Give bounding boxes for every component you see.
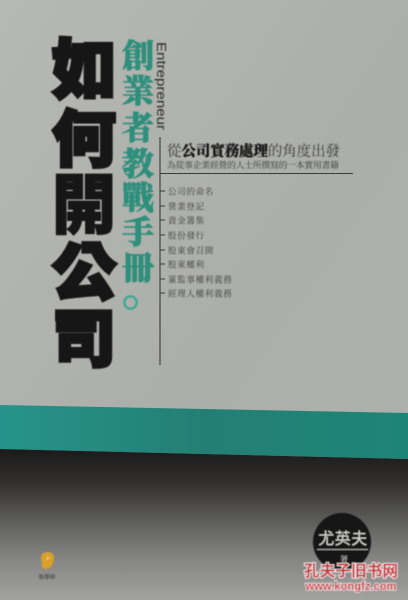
tagline second line: 為從事企業經營的人士所撰寫的一本實用書籍 [167, 159, 339, 170]
main title: 開 [52, 168, 116, 242]
main title: 如 [52, 33, 116, 107]
main title [52, 33, 116, 375]
topic list: 經理人權利義務 [168, 288, 232, 298]
tagline: 從公司實務處理的角度出發 [167, 142, 340, 160]
subtitle: green vertical: 創 [122, 38, 154, 74]
topic list: 股東會召開 [168, 246, 214, 256]
subtitle: green vertical: 者 [122, 110, 154, 146]
tagline [167, 142, 340, 170]
author badge: 著 [340, 554, 348, 564]
topic list: 資金籌集 [168, 216, 205, 226]
topic list: 營業登記 [168, 202, 205, 212]
main title: 何 [52, 106, 116, 175]
watermark: 孔夫子旧书网 [304, 561, 398, 580]
subtitle: green vertical: 教 [122, 146, 154, 182]
subtitle: green vertical: 手 [122, 214, 154, 250]
watermark url: www.kongfz.com [305, 581, 396, 593]
watermark [304, 561, 398, 593]
subtitle: green vertical: 戰 [122, 180, 155, 216]
subtitle: green vertical [122, 38, 160, 309]
main title: 司 [52, 306, 116, 375]
publisher logo [39, 552, 56, 581]
subtitle: green vertical: 冊 [122, 250, 154, 286]
topic list: 董監事權利義務 [168, 274, 232, 284]
topic list: 股東權利 [168, 260, 205, 270]
author badge [313, 513, 371, 571]
main title: 公 [52, 239, 116, 308]
vertical rule with ticks [160, 137, 353, 365]
dark gradient lower panel [0, 449, 408, 600]
author badge: 尤英夫 [318, 530, 368, 548]
topic list [168, 186, 232, 298]
publisher logo: 新學林 [39, 573, 56, 581]
teal band [0, 405, 408, 459]
topic list: 公司的命名 [168, 186, 214, 196]
topic list: 股份發行 [168, 230, 205, 240]
subtitle: green vertical: 業 [122, 73, 160, 109]
Entrepreneur label: Entrepreneur [154, 42, 168, 130]
